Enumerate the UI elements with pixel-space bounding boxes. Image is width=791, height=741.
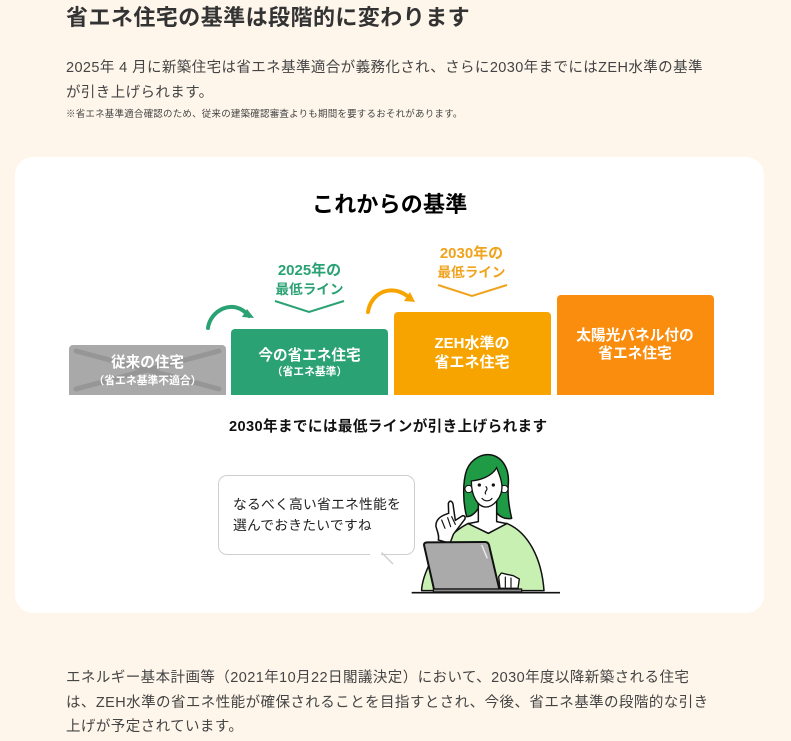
typing hand <box>499 573 519 588</box>
step: ZEH level <box>394 312 550 395</box>
bracket: 2030 <box>438 284 508 297</box>
step sublabel: （省エネ基準） <box>272 366 347 378</box>
title: 省エネ住宅の基準は段階的に変わります <box>66 5 470 30</box>
arrow: to current standard <box>206 304 254 330</box>
closing paragraph: エネルギー基本計画等（2021年10月22日閣議決定）において、2030年度以降新築される住宅 <box>66 670 689 686</box>
step label <box>434 335 510 371</box>
hair <box>464 455 512 519</box>
bubble text: 選んでおきたいですね <box>233 518 372 532</box>
closing paragraph: 上げが予定されています。 <box>66 719 243 735</box>
facial features <box>478 483 495 501</box>
label: 2030 minimum line: 2030年の <box>440 245 503 262</box>
step label: 今の省エネ住宅 <box>258 348 361 364</box>
step: current standard <box>231 329 388 395</box>
step: solar panel housing <box>556 295 714 395</box>
step: non-compliant housing <box>69 345 226 395</box>
caption: 2030年までには最低ラインが引き上げられます <box>229 419 548 435</box>
label: 2030 minimum line <box>438 245 505 280</box>
bubble tail <box>370 552 394 564</box>
closing paragraph <box>66 669 709 735</box>
bubble text <box>233 497 401 532</box>
step sublabel: （省エネ基準不適合） <box>94 375 201 387</box>
laptop <box>424 542 499 589</box>
label: 2030 minimum line: 最低ライン <box>438 265 505 280</box>
arrow: to ZEH level <box>366 288 415 314</box>
intro paragraph: 2025年 4 月に新築住宅は省エネ基準適合が義務化され、さらに2030年までにはZEH水準の基準 <box>66 60 703 76</box>
ears <box>465 485 472 493</box>
step label: ZEH水準の <box>434 335 510 352</box>
step label: 太陽光パネル付の <box>576 328 694 344</box>
closing paragraph: は、ZEH水準の省エネ性能が確保されることを目指すとされ、今後、省エネ基準の段階的な引き <box>66 694 709 710</box>
neck <box>468 500 507 533</box>
body <box>422 523 544 591</box>
panel heading: これからの基準 <box>312 192 467 217</box>
footnote: ※省エネ基準適合確認のため、従来の建築確認審査よりも期間を要するおそれがあります。 <box>66 109 463 120</box>
intro paragraph: が引き上げられます。 <box>66 85 214 101</box>
cross mark <box>74 348 222 392</box>
face <box>471 468 502 507</box>
step label: 省エネ住宅 <box>434 354 510 371</box>
label: 2025 minimum line <box>276 262 343 297</box>
label: 2025 minimum line: 最低ライン <box>276 282 343 297</box>
step label: 従来の住宅 <box>111 355 184 371</box>
panel: future standards <box>15 157 764 613</box>
desk line <box>412 590 560 595</box>
pointing hand <box>436 501 465 543</box>
illustration: woman with laptop <box>412 454 560 594</box>
step label <box>576 327 694 362</box>
label: 2025 minimum line: 2025年の <box>278 262 341 279</box>
bracket: 2025 <box>274 300 344 313</box>
speech bubble <box>218 475 415 555</box>
intro paragraph <box>66 59 703 101</box>
step label: 省エネ住宅 <box>598 346 672 362</box>
bubble text: なるべく高い省エネ性能を <box>233 497 401 512</box>
